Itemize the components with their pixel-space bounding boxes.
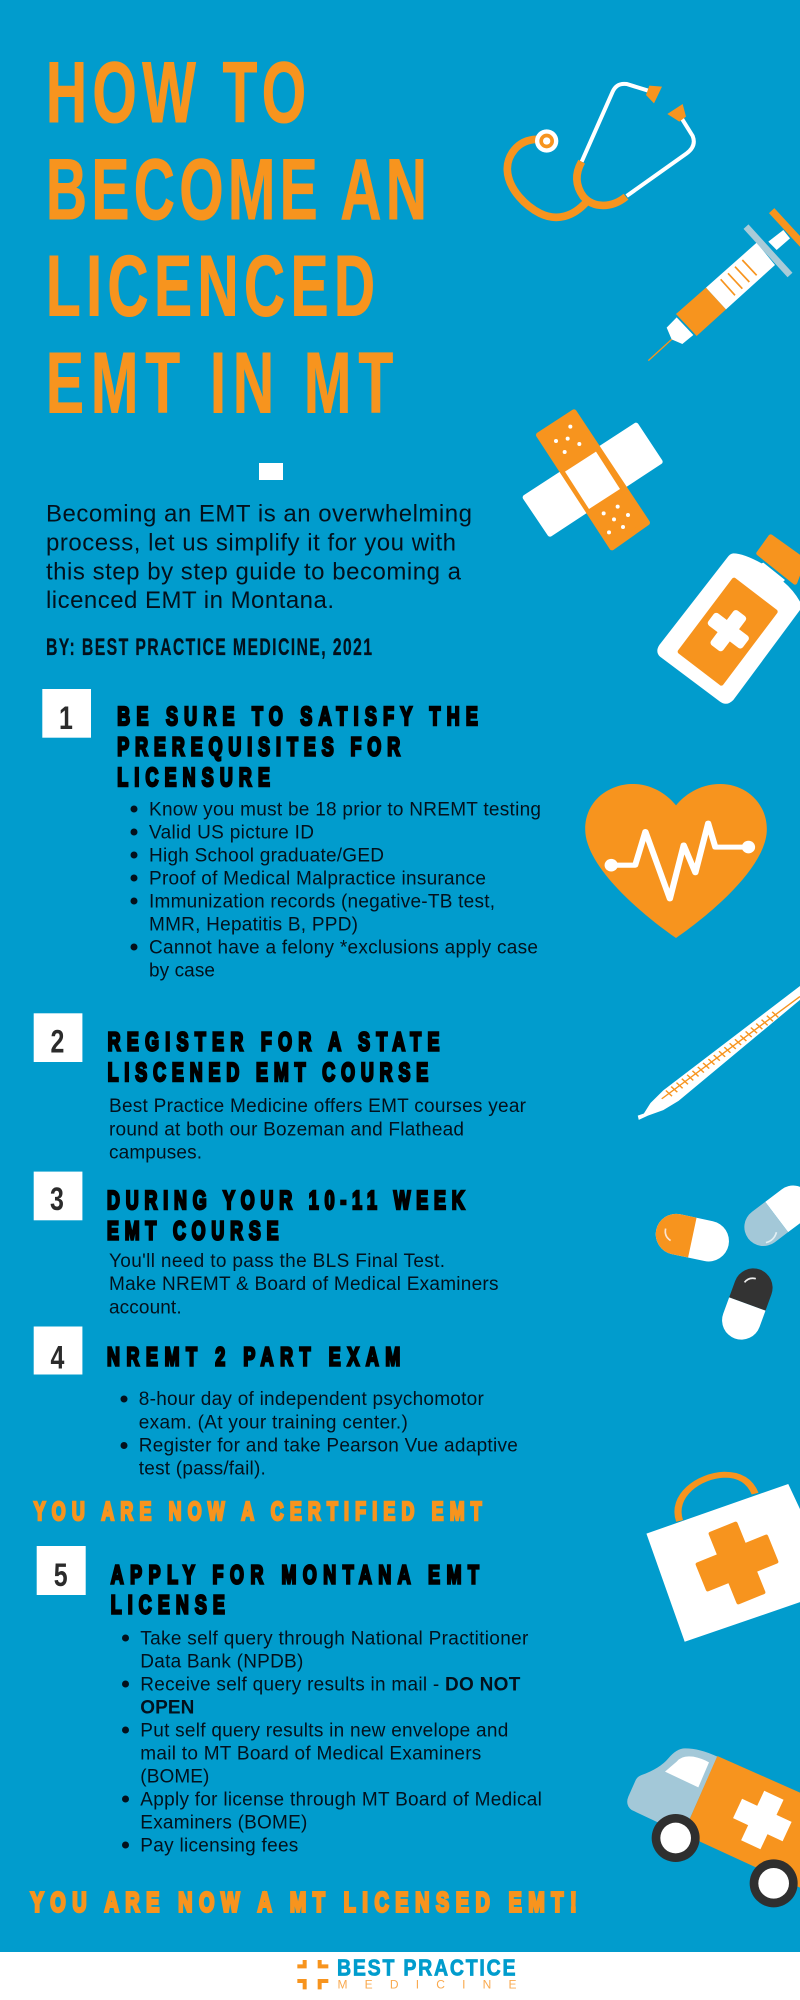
footer logo text: BEST PRACTICE [337,1955,516,1981]
step 1 list: High School graduate/GED [149,846,384,866]
title: HOW TO [46,45,306,141]
step 2 [34,1013,527,1164]
intro text: process, let us simplify it for you with [46,530,456,556]
step 4 [34,1326,518,1479]
step 1 list: by case [149,960,215,982]
intro text: Becoming an EMT is an overwhelming [46,500,472,528]
step 4 number box [34,1326,82,1376]
title: EMT IN MT [46,336,393,431]
step 1 heading: LICENSURE [117,763,270,792]
step 5 list: Receive self query results in mail - DO NOT [140,1674,521,1695]
icon: bandage [525,412,660,548]
step 3 heading: DURING YOUR 10-11 WEEK [107,1186,465,1215]
step 3 text [109,1251,498,1318]
step 3 text: You'll need to pass the BLS Final Test. [109,1251,445,1272]
small white square [259,463,283,480]
intro text: licenced EMT in Montana. [46,587,334,614]
icon: medicine bottle [657,537,800,704]
step 1 heading: BE SURE TO SATISFY THE [117,702,478,731]
step 5 list: Data Bank (NPDB) [140,1651,303,1672]
step 2 heading: LISCENED EMT COURSE [108,1058,428,1087]
step 4 list: Register for and take Pearson Vue adaptive [139,1436,518,1456]
step 4 list: 8-hour day of independent psychomotor [139,1389,484,1410]
step 1 list: MMR, Hepatitis B, PPD) [149,914,358,936]
step 3 text: account. [109,1297,182,1318]
icon: heart with pulse [585,784,767,938]
footer band [0,1952,800,2000]
step 5 list: (BOME) [140,1766,209,1787]
icon: stethoscope [507,84,694,217]
byline: BY: BEST PRACTICE MEDICINE, 2021 [46,635,372,661]
footer logo mark [297,1960,328,1989]
step 4 list [120,1389,518,1479]
step 2 heading [108,1027,439,1087]
step 5 list [122,1628,542,1856]
step 2 text [109,1096,527,1164]
icon: first aid kit [646,1475,800,1642]
step 1 list: Know you must be 18 prior to NREMT testing [149,800,541,820]
step 1 list: Proof of Medical Malpractice insurance [149,868,486,890]
icon: pills [652,1178,800,1345]
icon: ambulance [627,1748,800,1907]
step 5 [37,1546,542,1856]
step 3 heading: EMT COURSE [107,1216,278,1245]
step 5 list: mail to MT Board of Medical Examiners [140,1743,481,1764]
title [46,45,427,431]
step 1 heading: PREREQUISITES FOR [117,732,400,761]
step 2 text: Best Practice Medicine offers EMT courses year [109,1096,527,1117]
step 4 number box: 4 [51,1341,64,1376]
step 2 text: round at both our Bozeman and Flathead [109,1119,464,1140]
step 2 number box: 2 [51,1025,64,1060]
step 3 number box: 3 [50,1182,64,1218]
step 4 list: test (pass/fail). [139,1458,266,1479]
step 5 number box: 5 [54,1558,68,1594]
intro text: this step by step guide to becoming a [46,558,462,586]
step 5 heading [111,1560,479,1619]
step 2 heading: REGISTER FOR A STATE [108,1027,439,1056]
step 1 heading [117,702,478,792]
step 5 list: Put self query results in new envelope and [140,1720,508,1741]
step 3 [34,1172,498,1318]
icon: thermometer [638,986,800,1120]
step 5 number box [37,1546,86,1595]
title: BECOME AN [46,142,427,238]
icon: syringe [648,211,800,361]
callout: licensed EMT: YOU ARE NOW A MT LICENSED EMT! [31,1887,577,1918]
step 1 list: Immunization records (negative-TB test, [149,892,495,912]
intro text [46,500,472,614]
step 3 heading [107,1186,465,1245]
step 5 list: Pay licensing fees [140,1835,298,1856]
step 5 list: Examiners (BOME) [140,1812,307,1833]
step 1 number box [42,689,91,738]
step 5 list: OPEN [140,1697,194,1718]
step 1 list: Valid US picture ID [149,822,314,844]
step 3 text: Make NREMT & Board of Medical Examiners [109,1274,498,1295]
footer logo text: MEDICINE [338,1978,516,1992]
step 4 heading: NREMT 2 PART EXAM [107,1342,400,1371]
step 1 list [130,800,541,982]
callout: certified EMT: YOU ARE NOW A CERTIFIED EMT [34,1497,482,1526]
step 4 list: exam. (At your training center.) [139,1412,408,1433]
step 5 heading: APPLY FOR MONTANA EMT [111,1560,479,1589]
step 2 text: campuses. [109,1142,202,1164]
title: LICENCED [46,239,375,334]
step 5 list: Take self query through National Practitioner [140,1628,529,1649]
step 1 number box: 1 [59,701,73,737]
step 5 heading: LICENSE [111,1590,225,1619]
step 5 list: Apply for license through MT Board of Medical [140,1789,542,1810]
step 1 list: Cannot have a felony *exclusions apply case [149,938,538,958]
step 3 number box [34,1172,82,1220]
step 2 number box [34,1013,82,1062]
step 1 [42,689,541,982]
